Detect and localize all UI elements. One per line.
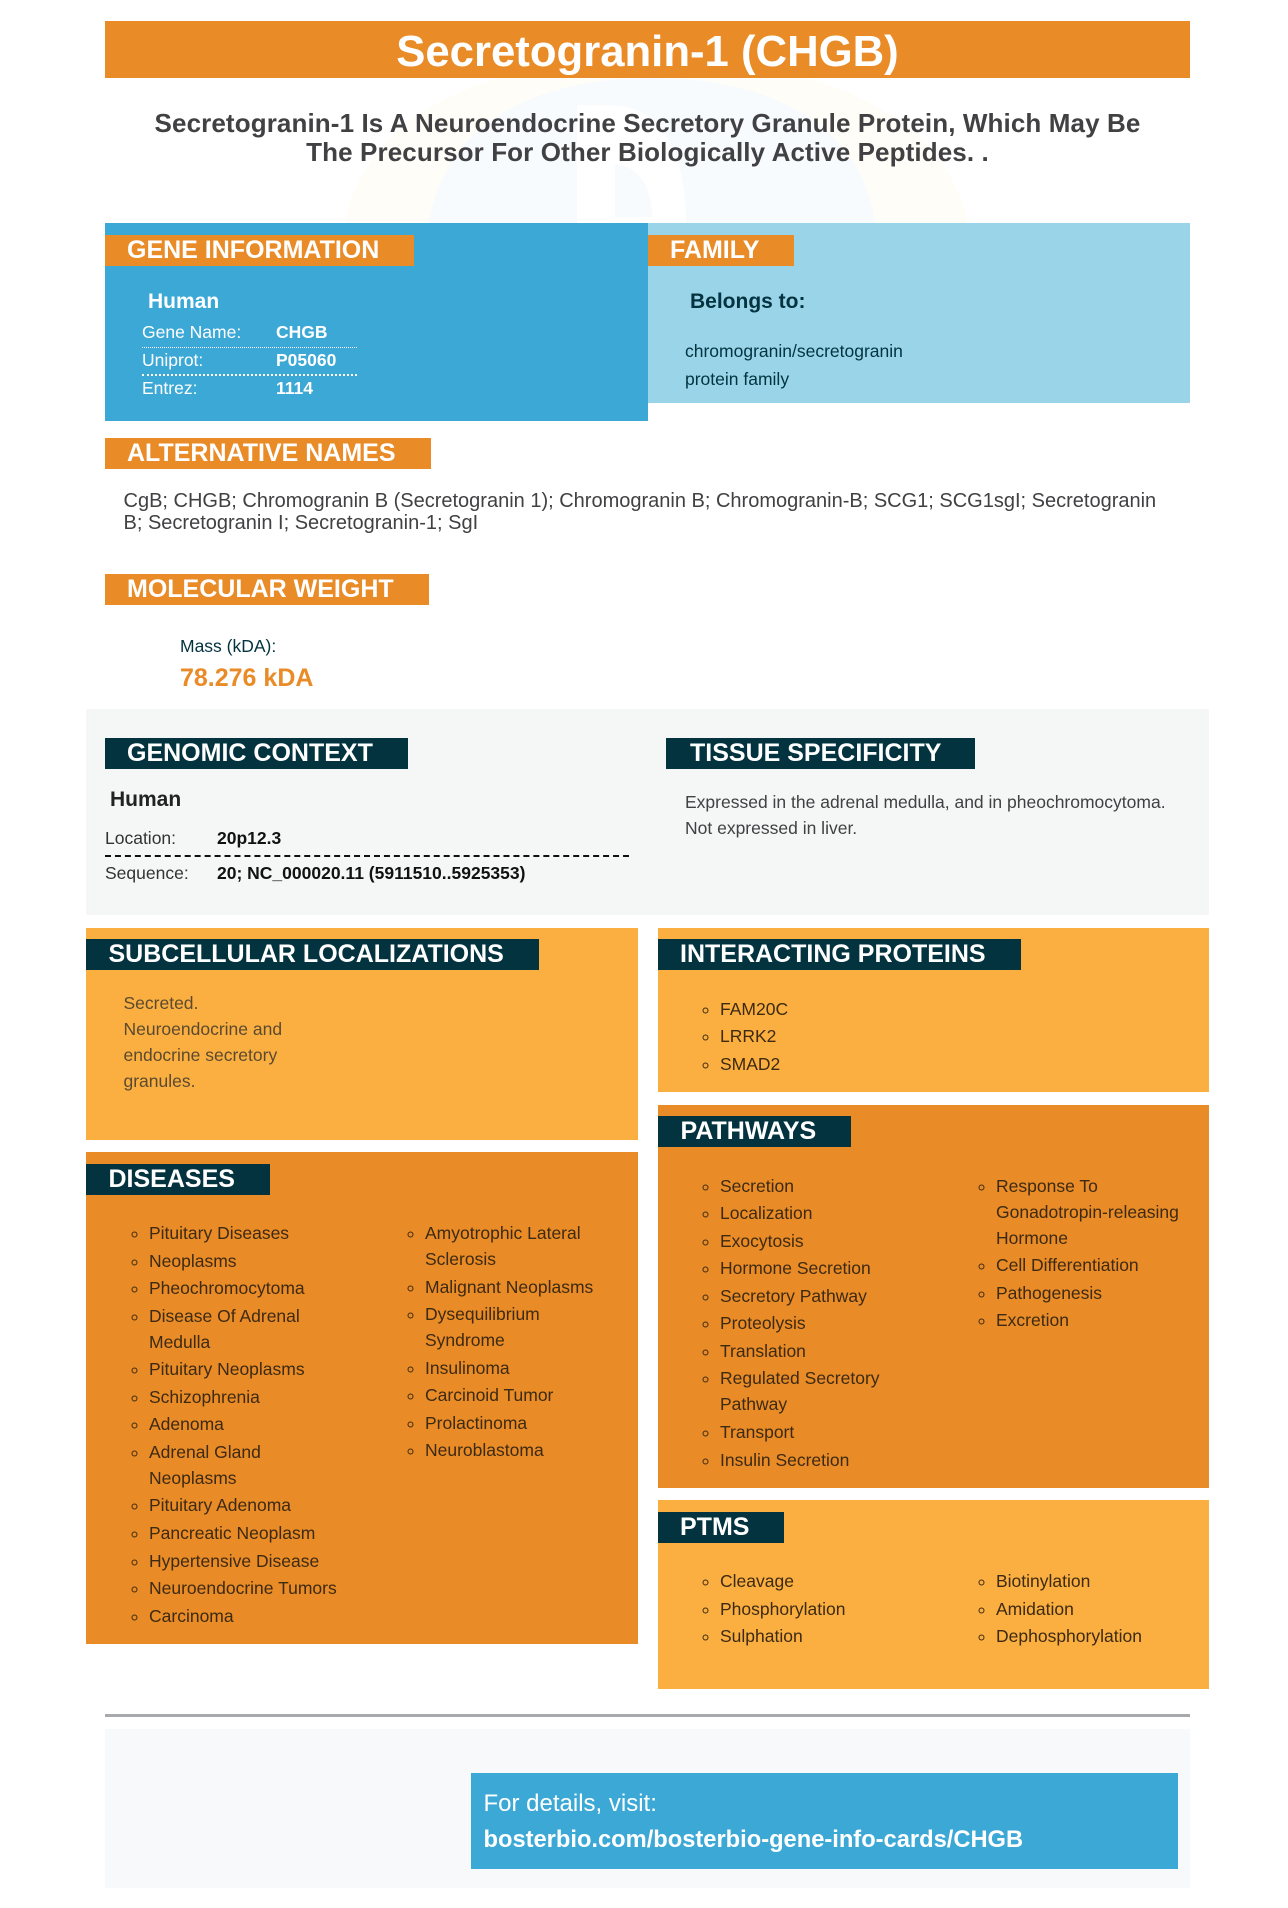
entrez row (142, 378, 313, 398)
heading: family: FAMILY (670, 236, 759, 264)
uniprot row: P05060 (276, 350, 336, 370)
tissue specificity text (685, 792, 1166, 838)
pathway list column 1: Proteolysis (720, 1313, 806, 1333)
disease list column 1: Neuroendocrine Tumors (149, 1578, 337, 1598)
sequence row: 20; NC_000020.11 (5911510..5925353) (217, 863, 525, 883)
pathway list column 1: Secretory Pathway (720, 1286, 867, 1306)
callout: details link (471, 1773, 1178, 1869)
panel: interacting proteins (658, 928, 1209, 1092)
heading: molecular weight: MOLECULAR WEIGHT (127, 575, 394, 603)
disease list column 1: Neoplasms (149, 1251, 237, 1271)
panel: diseases (86, 1152, 638, 1644)
pathway list column 1: Secretion (720, 1176, 794, 1196)
disease list column 1: Adenoma (149, 1414, 224, 1434)
pathway list column 2: Response To (996, 1176, 1098, 1196)
disease list column 1: Adrenal Gland (149, 1442, 261, 1462)
entrez row: Entrez: (142, 378, 197, 398)
disease list column 1: Pheochromocytoma (149, 1278, 305, 1298)
pathway list column 1: Pathway (720, 1394, 787, 1414)
alternative names text (124, 490, 1156, 534)
protein list: FAM20C (720, 999, 788, 1019)
heading: subcellular localizations: SUBCELLULAR LOCALIZATIONS (108, 940, 504, 968)
pathway list column 1: Insulin Secretion (720, 1450, 849, 1470)
family text (685, 341, 903, 389)
panel: subcellular localizations (86, 928, 638, 1140)
disease list column 1: Neoplasms (149, 1468, 237, 1488)
gene name row: Gene Name: (142, 322, 241, 342)
subtitle: Secretogranin-1 Is A Neuroendocrine Secretory Granule Protein, Which May Be (155, 108, 1140, 138)
heading: pathways: PATHWAYS (680, 1117, 816, 1145)
divider rule (105, 1714, 1190, 1717)
localization text: Secreted. (124, 993, 198, 1013)
pathway list column 2 (978, 1176, 1179, 1330)
gene name row: CHGB (276, 322, 328, 342)
pathway list column 2: Excretion (996, 1310, 1069, 1330)
title banner (105, 21, 1190, 78)
mass label: Mass (kDA): (180, 636, 276, 656)
pathway list column 2: Cell Differentiation (996, 1255, 1139, 1275)
callout label: For details, visit: (484, 1790, 657, 1817)
localization text: endocrine secretory (124, 1045, 277, 1065)
ptm list column 1 (702, 1571, 846, 1646)
family text: chromogranin/secretogranin (685, 341, 903, 361)
disease list column 2: Prolactinoma (425, 1413, 527, 1433)
protein list (702, 999, 788, 1074)
disease list column 1 (132, 1223, 337, 1626)
disease list column 2: Sclerosis (425, 1249, 496, 1269)
subtitle: The Precursor For Other Biologically Active Peptides. . (306, 137, 989, 167)
disease list column 1: Carcinoma (149, 1606, 234, 1626)
tissue specificity text: Not expressed in liver. (685, 818, 857, 838)
disease list column 1: Pituitary Neoplasms (149, 1359, 305, 1379)
ptm list column 1: Cleavage (720, 1571, 794, 1591)
species label: Human (110, 788, 181, 811)
pathway list column 1: Translation (720, 1341, 806, 1361)
disease list column 2: Neuroblastoma (425, 1440, 544, 1460)
heading: ptms (658, 1512, 784, 1543)
subtitle (155, 108, 1140, 167)
disease list column 2: Carcinoid Tumor (425, 1385, 553, 1405)
heading: interacting proteins: INTERACTING PROTEINS (680, 940, 986, 968)
localization text: Neuroendocrine and (124, 1019, 282, 1039)
pathway list column 1: Localization (720, 1203, 812, 1223)
panel: family (648, 223, 1190, 403)
pathway list column 2: Pathogenesis (996, 1283, 1102, 1303)
footer panel (105, 1729, 1190, 1888)
gene name row (142, 321, 357, 348)
sequence row: Sequence: (105, 863, 189, 883)
ptm list column 1: Sulphation (720, 1626, 803, 1646)
panel: genomic context and tissue specificity (86, 709, 1209, 915)
location row (105, 826, 629, 857)
protein list: SMAD2 (720, 1054, 780, 1074)
pathway list column 1 (702, 1176, 880, 1470)
pathway list column 1: Hormone Secretion (720, 1258, 871, 1278)
pathway list column 2: Gonadotropin-releasing (996, 1202, 1179, 1222)
title banner: Secretogranin-1 (CHGB) (396, 27, 899, 76)
location row: 20p12.3 (217, 828, 281, 848)
disease list column 2: Dysequilibrium (425, 1304, 540, 1324)
uniprot row (142, 349, 357, 376)
entrez row: 1114 (276, 378, 313, 398)
localization text: granules. (124, 1071, 196, 1091)
disease list column 2: Insulinoma (425, 1358, 510, 1378)
ptm list column 1: Phosphorylation (720, 1599, 846, 1619)
panel: pathways (658, 1105, 1209, 1488)
disease list column 1: Pituitary Diseases (149, 1223, 289, 1243)
panel: gene information (105, 223, 648, 421)
heading: gene information: GENE INFORMATION (127, 236, 379, 264)
ptm list column 2: Biotinylation (996, 1571, 1090, 1591)
disease list column 1: Medulla (149, 1332, 210, 1352)
pathway list column 1: Transport (720, 1422, 794, 1442)
heading: family (648, 235, 794, 266)
panel: ptms (658, 1500, 1209, 1689)
callout url: bosterbio.com/bosterbio-gene-info-cards/CHGB (484, 1827, 1023, 1853)
heading: alternative names: ALTERNATIVE NAMES (127, 439, 396, 467)
tissue specificity text: Expressed in the adrenal medulla, and in pheochromocytoma. (685, 792, 1166, 812)
disease list column 2: Amyotrophic Lateral (425, 1223, 581, 1243)
disease list column 1: Disease Of Adrenal (149, 1306, 300, 1326)
heading: tissue specificity: TISSUE SPECIFICITY (690, 739, 941, 767)
protein list: LRRK2 (720, 1026, 776, 1046)
heading: diseases (86, 1164, 270, 1195)
disease list column 1: Schizophrenia (149, 1387, 260, 1407)
background watermark (0, 0, 1288, 240)
ptm list column 2: Dephosphorylation (996, 1626, 1142, 1646)
disease list column 1: Pancreatic Neoplasm (149, 1523, 315, 1543)
uniprot row: Uniprot: (142, 350, 203, 370)
disease list column 2: Syndrome (425, 1330, 505, 1350)
heading: diseases: DISEASES (108, 1165, 235, 1193)
disease list column 2: Malignant Neoplasms (425, 1277, 593, 1297)
pathway list column 1: Regulated Secretory (720, 1368, 880, 1388)
mass value: 78.276 kDA (180, 664, 313, 692)
disease list column 2 (408, 1223, 593, 1460)
family text: protein family (685, 369, 789, 389)
belongs to label: Belongs to: (690, 290, 806, 313)
ptm list column 2: Amidation (996, 1599, 1074, 1619)
disease list column 1: Hypertensive Disease (149, 1551, 319, 1571)
location row: Location: (105, 828, 176, 848)
heading: pathways (658, 1116, 851, 1147)
heading: genomic context: GENOMIC CONTEXT (127, 739, 373, 767)
alternative names text: B; Secretogranin I; Secretogranin-1; SgI (124, 512, 478, 534)
disease list column 1: Pituitary Adenoma (149, 1495, 291, 1515)
localization text (124, 993, 282, 1091)
ptm list column 2 (978, 1571, 1142, 1646)
alternative names text: CgB; CHGB; Chromogranin B (Secretogranin 1); Chromogranin B; Chromogranin-B; SCG1; SCG1sgI; Secretogranin (124, 490, 1156, 512)
heading: ptms: PTMS (680, 1513, 749, 1541)
pathway list column 1: Exocytosis (720, 1231, 804, 1251)
pathway list column 2: Hormone (996, 1228, 1068, 1248)
species label: Human (148, 290, 219, 313)
